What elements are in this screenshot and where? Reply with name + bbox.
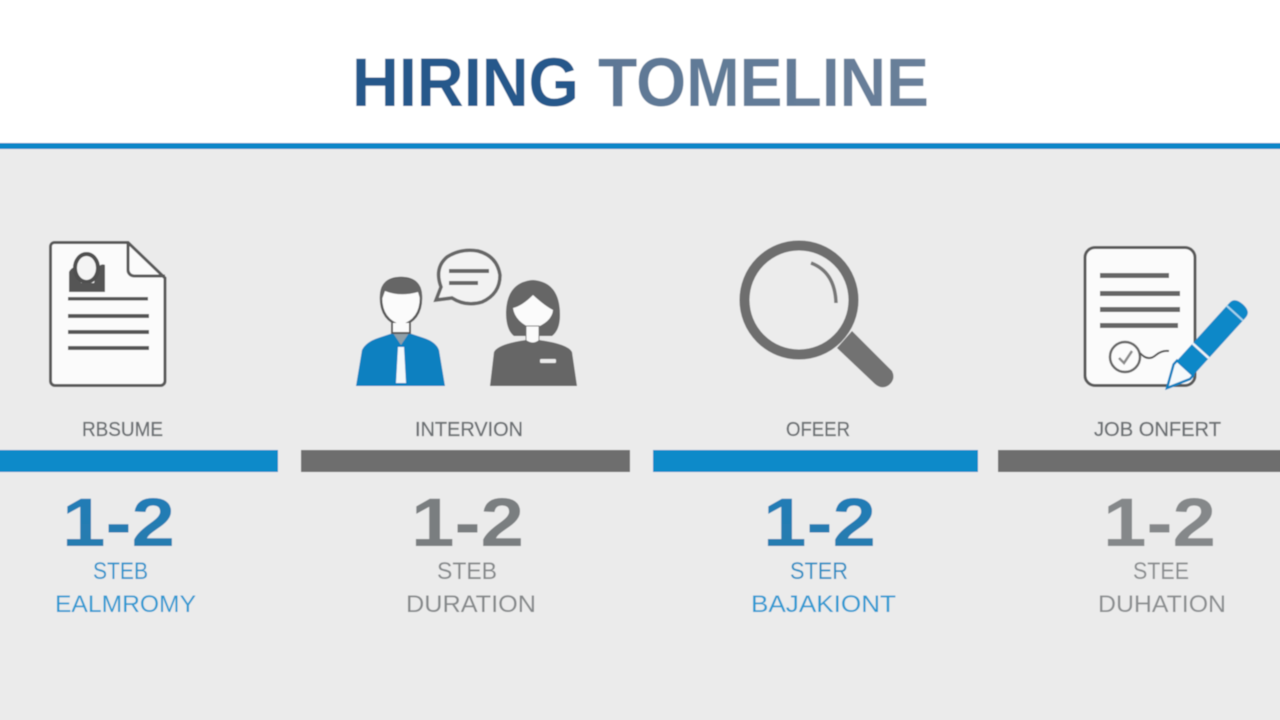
- icon: magnifying glass: [744, 246, 893, 387]
- step label: INTERVION: [415, 419, 523, 441]
- step text: STER: [790, 558, 848, 585]
- timeline bar: [301, 450, 630, 472]
- title: TOMELINE: [598, 44, 929, 121]
- duration number: 1-2: [763, 484, 876, 561]
- icon: signed contract and pen: [1085, 248, 1251, 395]
- man: [356, 278, 445, 386]
- duration number: 1-2: [411, 484, 524, 561]
- step label: RBSUME: [82, 419, 163, 441]
- duration number: 1-2: [1103, 484, 1216, 561]
- icon: two people talking: [356, 250, 577, 386]
- step text: STEB: [437, 558, 497, 585]
- panel: step 1 resume: [0, 242, 278, 618]
- timeline bar: [653, 450, 978, 472]
- timeline bar: [998, 450, 1280, 472]
- duration number: 1-2: [62, 484, 175, 561]
- woman: [490, 280, 577, 386]
- step text: STEE: [1133, 558, 1189, 585]
- panel: step 4 job offer: [998, 248, 1280, 618]
- speech bubble: [436, 250, 500, 304]
- title: HIRING: [352, 44, 579, 121]
- description: DUHATION: [1098, 591, 1226, 618]
- description: DURATION: [406, 591, 536, 618]
- description: EALMROMY: [55, 591, 196, 618]
- timeline bar: [0, 450, 278, 472]
- icon: resume document: [50, 242, 165, 386]
- step label: OFEER: [786, 419, 850, 441]
- panel: step 3 offer: [653, 246, 978, 618]
- title: [352, 44, 929, 121]
- step text: STEB: [93, 558, 148, 585]
- step label: JOB ONFERT: [1094, 419, 1221, 441]
- header divider: [0, 143, 1280, 149]
- panel: step 2 interview: [301, 250, 630, 618]
- description: BAJAKIONT: [751, 591, 896, 618]
